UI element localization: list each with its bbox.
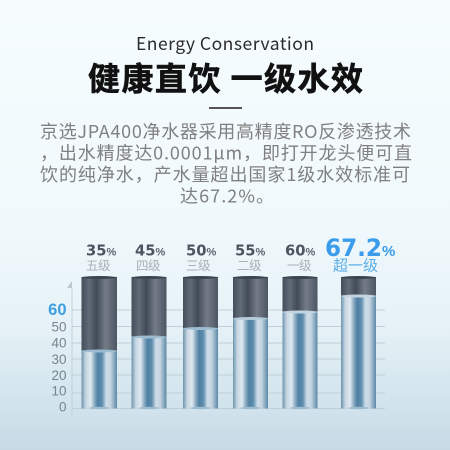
value label: 50% level 3 [186, 242, 216, 274]
body text block: 达67.2%。 [180, 182, 274, 208]
cylinder: level 1, 60% [282, 276, 318, 409]
value label: 50% level 3: 三级 [186, 255, 211, 274]
value label: 60% level 1: % [306, 246, 316, 258]
value label: 55% level 2: 55 [235, 242, 256, 260]
axis labels: 40 [51, 336, 66, 350]
value label: 67.2% super level 1: 67.2 [325, 234, 382, 262]
short divider [209, 107, 242, 109]
body text block: 饮的纯净水，产水量超出国家1级水效标准可 [40, 161, 410, 187]
axis labels: 20 [51, 368, 66, 383]
cylinder: level 2, 55% [233, 276, 268, 409]
value label: 35% level 5: % [106, 246, 116, 258]
value label: 67.2% super level 1: % [382, 243, 395, 260]
axis labels [48, 301, 66, 414]
cylinder: level 5, 35% [82, 276, 117, 409]
axis labels: 60 [48, 301, 66, 319]
chart: water efficiency cylinders [48, 234, 395, 416]
value label: 55% level 2: 二级 [237, 255, 262, 274]
axis labels: 50 [51, 320, 66, 334]
value label: 50% level 3: % [206, 246, 216, 258]
value label: 35% level 5: 35 [86, 242, 106, 260]
axis labels: 30 [51, 352, 66, 367]
cylinder: super level 1, 67.2% [341, 276, 376, 409]
value label: 45% level 4 [135, 242, 166, 274]
body text block [40, 118, 412, 208]
body text block: 京选JPA400净水器采用高精度RO反渗透技术 [40, 118, 411, 144]
value label: 50% level 3: 50 [186, 242, 207, 260]
value label: 35% level 5 [86, 242, 116, 274]
title: 健康直饮 一级水效 [88, 54, 363, 100]
value label: 67.2% super level 1: 超一级 [333, 254, 378, 276]
subtitle: Energy Conservation: Energy Conservation [136, 31, 314, 56]
value label: 45% level 4: 45 [135, 242, 156, 260]
body text block: ，出水精度达0.0001μm，即打开龙头便可直 [40, 140, 412, 166]
value label: 55% level 2 [235, 242, 266, 274]
value label: 67.2% super level 1 [325, 234, 395, 276]
value label: 45% level 4: % [156, 246, 166, 258]
value label: 55% level 2: % [256, 246, 266, 258]
value label: 45% level 4: 四级 [136, 255, 161, 274]
axis arrow [67, 281, 72, 288]
cylinder: level 3, 50% [183, 276, 218, 409]
value label: 60% level 1: 60 [285, 242, 306, 260]
axis and grid lines [72, 288, 385, 416]
value label: 60% level 1 [285, 242, 316, 274]
value label: 60% level 1: 一级 [287, 255, 312, 274]
axis labels: 10 [51, 384, 66, 398]
value label: 35% level 5: 五级 [86, 255, 111, 274]
axis labels: 0 [59, 400, 66, 414]
cylinder: level 4, 45% [132, 276, 166, 409]
